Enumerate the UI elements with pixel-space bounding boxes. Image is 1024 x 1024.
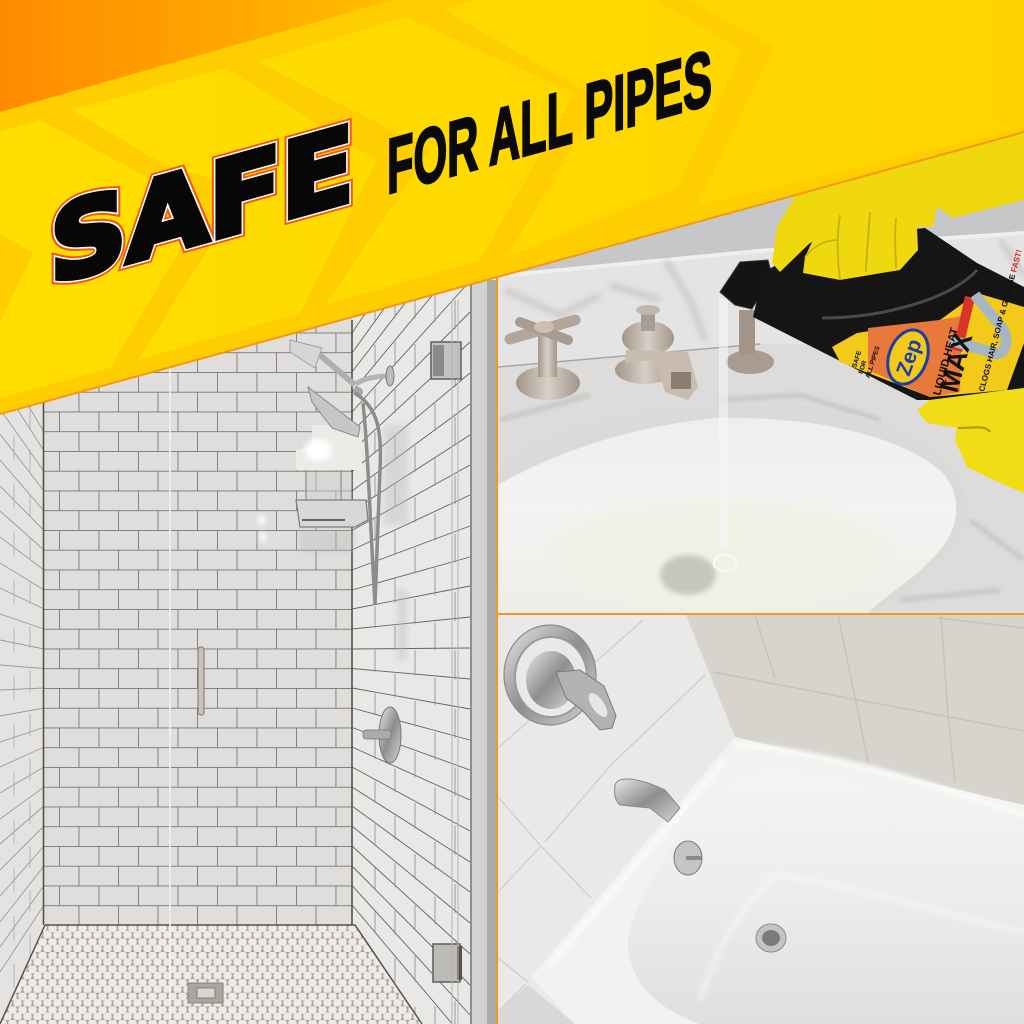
left tile wall xyxy=(498,615,1024,1024)
marble backsplash xyxy=(498,235,1024,366)
label text: liquid heat: LIQUID HEAT xyxy=(931,326,961,397)
banner light panels xyxy=(0,0,1024,398)
label text: safe for all pipes: FOR xyxy=(858,359,869,375)
sink rim xyxy=(867,418,868,419)
wall corners xyxy=(44,320,352,925)
glove finger creases xyxy=(805,212,896,280)
wall valve xyxy=(363,707,401,763)
left faucet handle xyxy=(510,320,580,400)
SAFE heading xyxy=(50,103,354,309)
SAFE white outline: SAFE xyxy=(50,103,354,309)
label text: max: MAX xyxy=(934,330,978,396)
grey wall xyxy=(520,196,1024,272)
left tile wall xyxy=(0,340,44,1024)
upper door hinge xyxy=(431,342,461,379)
door frame xyxy=(470,280,497,1024)
countertop veins xyxy=(500,395,1024,600)
lower door hinge xyxy=(433,944,462,982)
bottle body xyxy=(753,228,1024,400)
water stream xyxy=(719,298,728,548)
label text: claims: CLOGS HAIR, SOAP & GREASE FAST! xyxy=(977,249,1024,393)
floor drain xyxy=(188,983,223,1003)
right wall grout xyxy=(713,615,1024,782)
tub floor edge xyxy=(700,875,1024,1000)
panel: sink photo xyxy=(498,120,1024,613)
right tile wall xyxy=(686,615,1024,806)
lower glove xyxy=(917,388,1024,493)
countertop edge shadow xyxy=(498,344,760,367)
label text: safe for all pipes: ALL PIPES xyxy=(865,345,882,379)
orange corner xyxy=(0,0,393,112)
lower left tile shadow xyxy=(498,985,575,1024)
floor edges xyxy=(0,925,422,1024)
marble top edge xyxy=(498,233,1024,276)
Zep logo xyxy=(881,324,935,390)
marble veins xyxy=(505,240,1024,340)
SAFE black fill: SAFE xyxy=(50,103,354,309)
tub basin xyxy=(628,770,1024,1024)
label flame graphic xyxy=(868,316,962,397)
divider: vertical orange line xyxy=(496,270,498,1024)
water ripple xyxy=(714,555,736,571)
upper glove xyxy=(772,120,1024,280)
drain xyxy=(660,555,716,595)
bottle highlight xyxy=(822,270,977,318)
bottle xyxy=(720,228,1024,400)
wall reflections xyxy=(257,515,267,542)
overflow plate xyxy=(674,841,702,875)
tub rim xyxy=(531,737,1024,1024)
left wall grout xyxy=(498,620,705,1012)
shower hose xyxy=(355,393,380,604)
divider: horizontal orange line xyxy=(498,613,1024,615)
tub drain xyxy=(756,924,786,952)
panel: shower photo xyxy=(0,280,496,1024)
panel: bathtub photo xyxy=(498,615,1024,1024)
label text: safe for all pipes: SAFE xyxy=(851,349,863,369)
rim highlight xyxy=(550,745,1024,965)
right faucet handle xyxy=(726,310,774,374)
back tile wall xyxy=(44,300,352,925)
shower caddy xyxy=(296,425,368,527)
door handle xyxy=(198,647,204,715)
banner xyxy=(0,0,1024,414)
shadows of shower fittings xyxy=(300,425,408,660)
product label xyxy=(832,293,1024,397)
banner base xyxy=(0,0,1024,414)
sink basin xyxy=(498,418,956,613)
banner bottom edge xyxy=(0,132,1024,414)
label red tab xyxy=(953,296,975,352)
shower head and arm xyxy=(290,340,394,437)
bottle cap xyxy=(720,260,772,309)
tub spout xyxy=(615,779,680,822)
right tile wall xyxy=(352,286,470,1024)
label pipe graphic xyxy=(950,295,1006,354)
water pool xyxy=(562,503,880,552)
Zep logo: Zep xyxy=(892,336,927,379)
glass door edge xyxy=(169,330,171,1024)
shower valve handle xyxy=(504,625,616,730)
hex tile floor xyxy=(0,925,422,1024)
centre faucet xyxy=(615,305,698,400)
SAFE orange halo: SAFE xyxy=(50,103,354,309)
countertop xyxy=(498,344,1024,613)
door glass edge xyxy=(452,300,458,1024)
